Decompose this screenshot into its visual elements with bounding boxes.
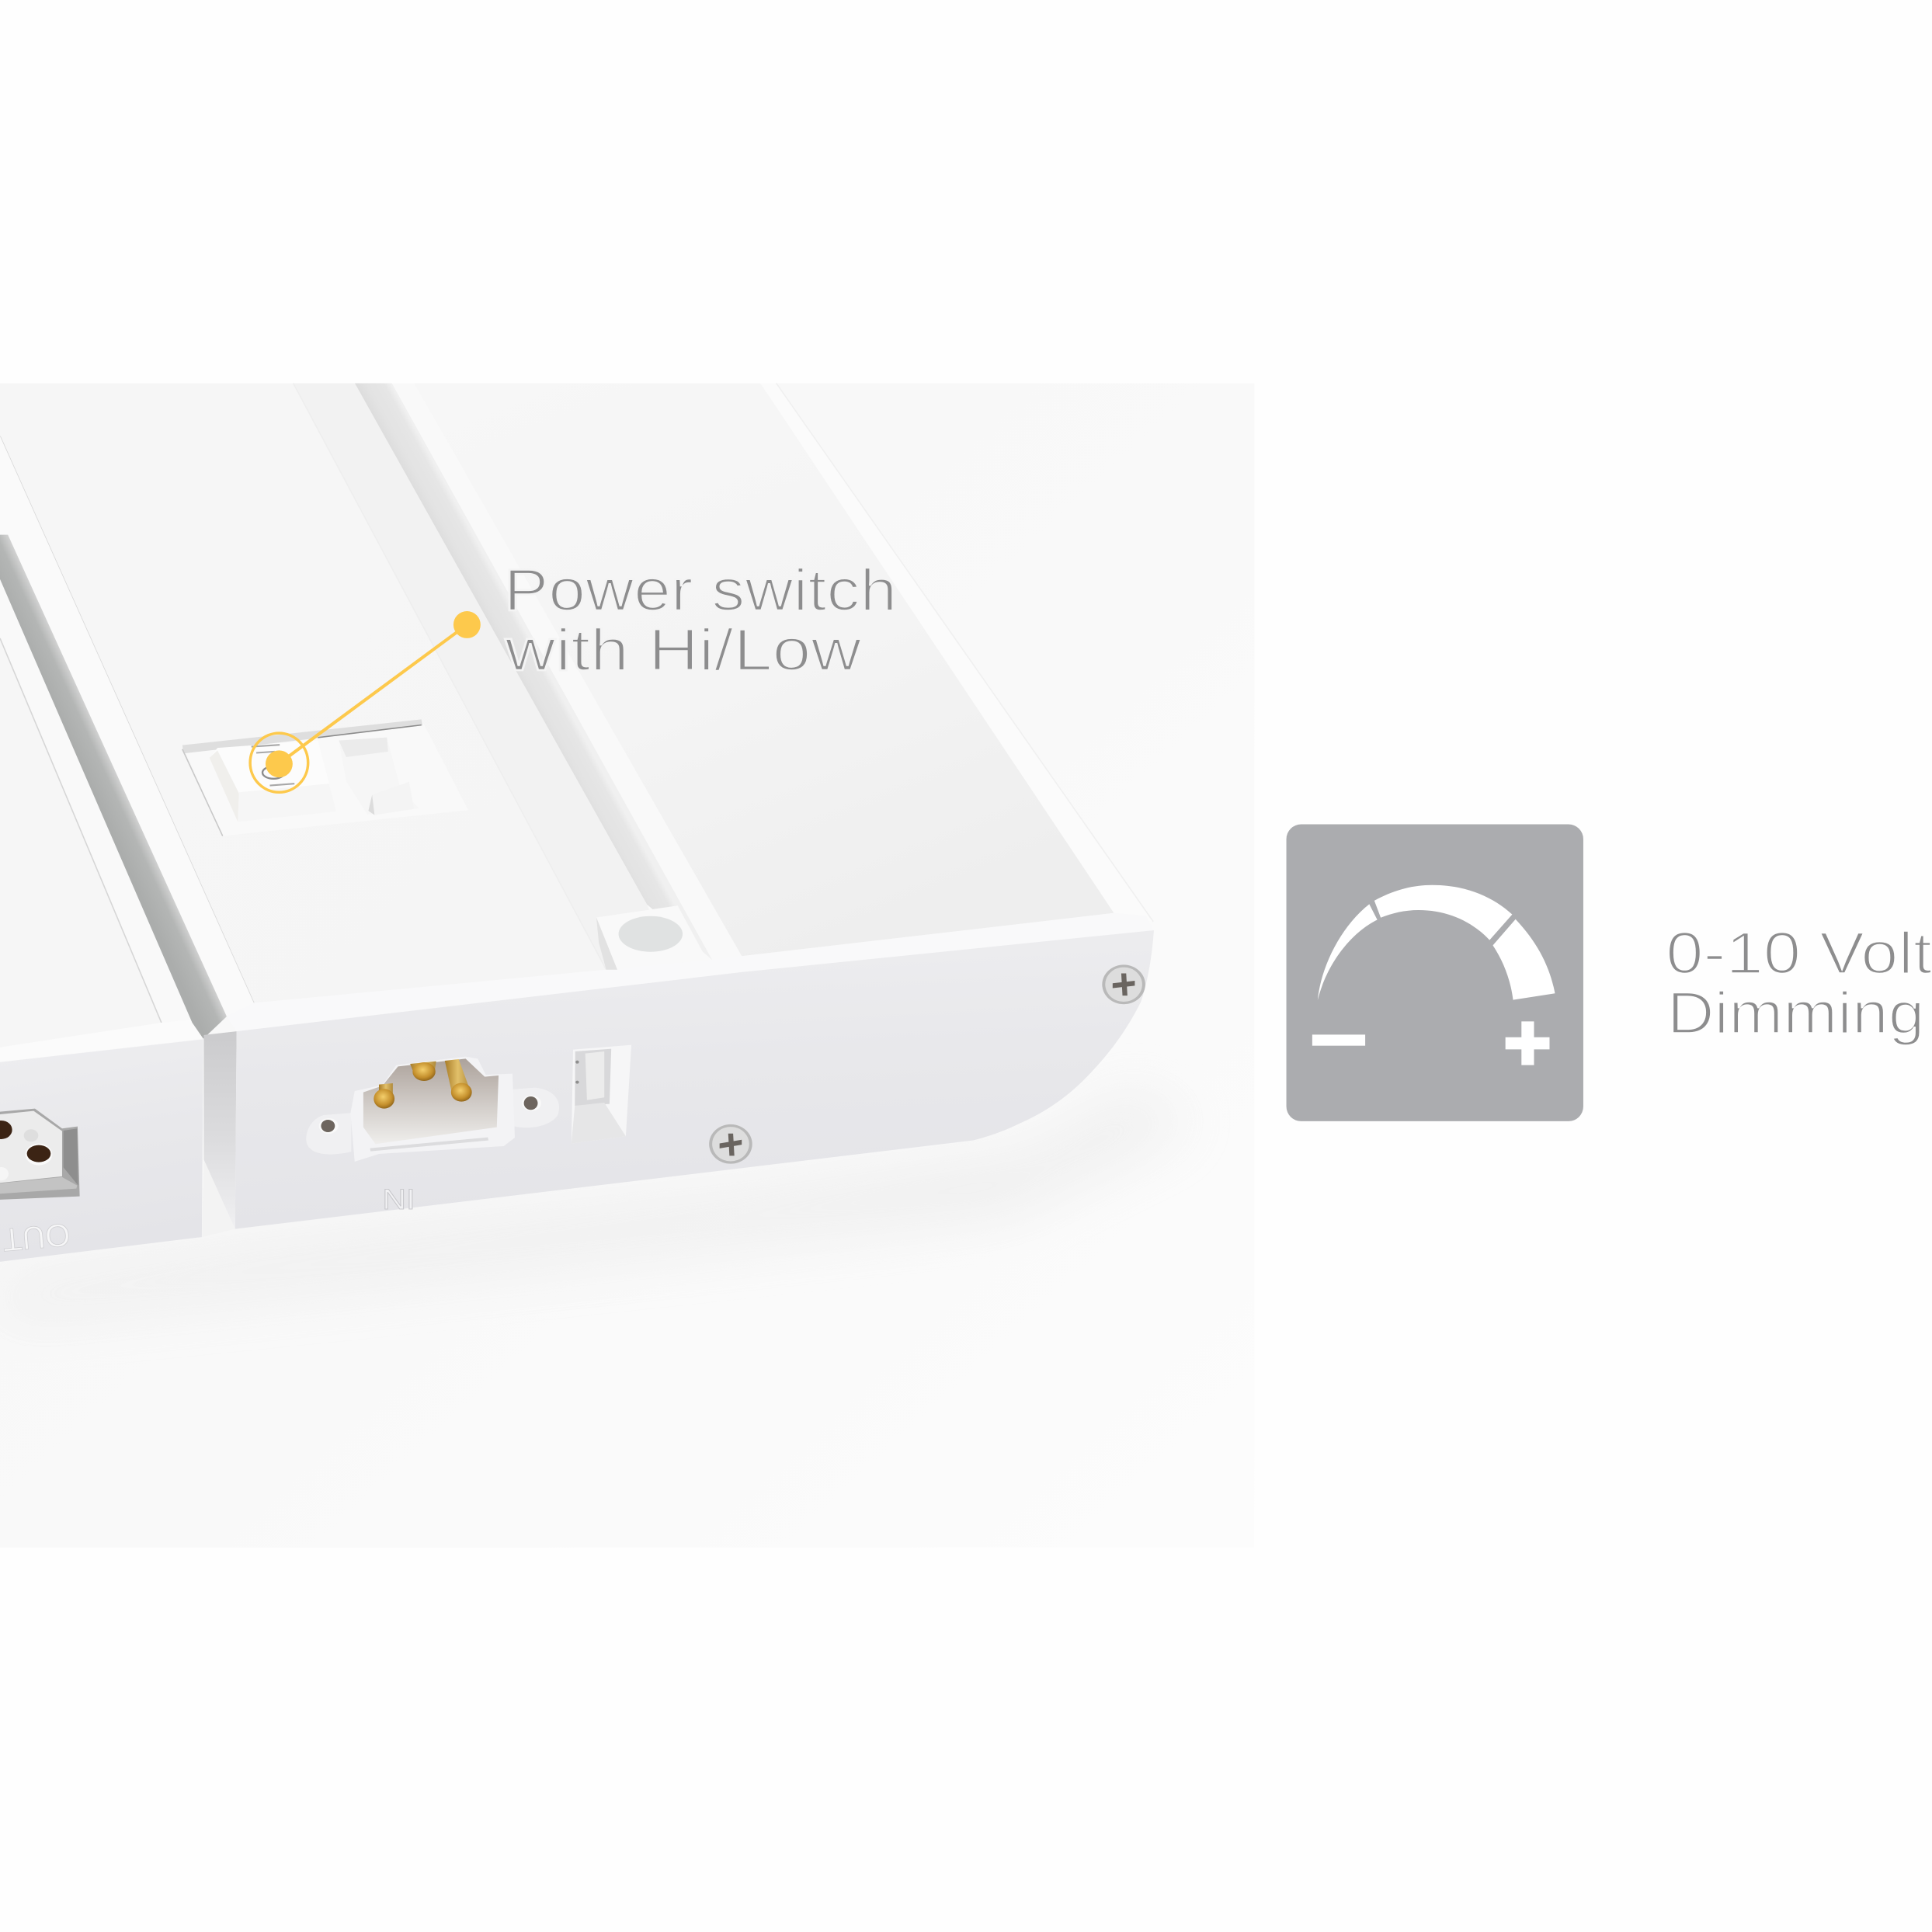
embossed label: NI <box>382 1184 415 1216</box>
floor wedge between bars <box>202 1159 235 1237</box>
callout text: power switch: Power switch <box>504 558 897 624</box>
switch dot <box>266 750 293 777</box>
channel shaded band <box>353 383 712 960</box>
icon: dimming dial <box>1287 825 1583 1121</box>
screw right <box>1102 964 1145 1004</box>
IN connector <box>306 1045 631 1216</box>
connector opening <box>363 1058 499 1144</box>
left rail of right bar <box>0 436 254 1016</box>
text: dimming label: 0-10 Volt <box>1666 921 1932 987</box>
left bar front face <box>0 1039 203 1262</box>
dial mid segment <box>1374 885 1512 940</box>
connector frame <box>350 1057 515 1162</box>
left driver cover panel <box>0 383 606 1003</box>
power switch housing <box>182 719 468 836</box>
groove between bars <box>0 535 227 1039</box>
minus sign <box>1312 1034 1365 1046</box>
switch ring <box>250 733 308 792</box>
connector mount tabs <box>306 1113 351 1155</box>
right bar front lip <box>226 913 1154 1031</box>
recess top edge <box>182 719 422 753</box>
screw front <box>709 1124 752 1164</box>
dial low segment <box>1318 904 1378 1000</box>
text: dimming label: Dimming <box>1667 980 1924 1046</box>
rocker switch <box>210 741 336 822</box>
callout text: power switch: with Hi/Low <box>504 617 862 683</box>
plus sign <box>1506 1021 1549 1065</box>
leader line <box>279 624 467 764</box>
brass pins <box>379 1083 393 1100</box>
dial high segment <box>1492 919 1555 1000</box>
channel strip <box>294 383 672 970</box>
side port <box>572 1045 631 1144</box>
callout text: power switch <box>504 558 897 683</box>
soft shadow under light bars <box>0 1090 1195 1319</box>
left bar top <box>0 579 203 1062</box>
right bar front face <box>235 930 1154 1229</box>
right bar outer rail <box>760 383 1153 922</box>
callout: power switch marker <box>250 611 481 792</box>
text: dimming label <box>1666 921 1932 1046</box>
left bar socket <box>0 1109 80 1200</box>
diffuser lens <box>413 383 1114 956</box>
anchor dot <box>453 611 481 638</box>
slide switch <box>339 738 419 815</box>
mounting hole block <box>596 905 706 970</box>
product photo panel <box>0 383 1254 1548</box>
embossed label OUT: OUT <box>1 1217 71 1258</box>
inner channel rail <box>392 383 742 960</box>
right bar side <box>203 1031 237 1229</box>
